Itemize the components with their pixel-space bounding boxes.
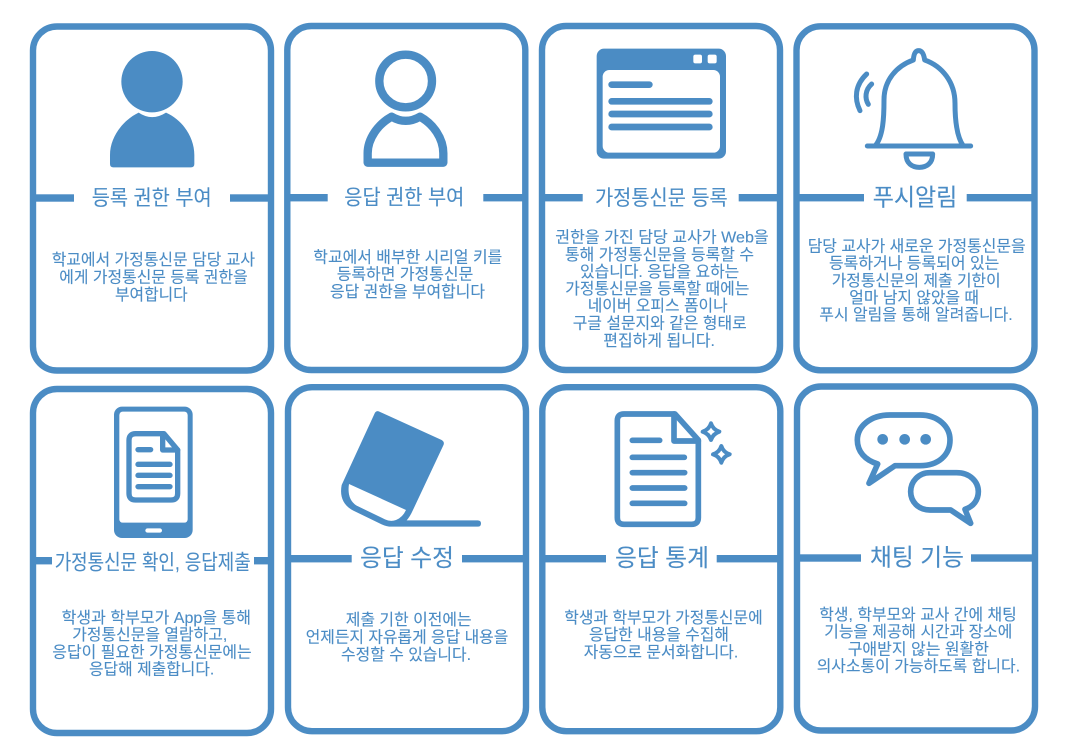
- text block: 권한을 가진 담당 교사가 Web을: [555, 228, 769, 246]
- icon: chat bubbles: [857, 415, 978, 523]
- text block: 학생, 학부모와 교사 간에 채팅: [819, 606, 1017, 624]
- text block: 편집하게 됩니다.: [603, 332, 715, 350]
- text block: [564, 609, 763, 662]
- icon: browser window: [597, 49, 726, 159]
- text block: 응답한 내용을 수집해: [589, 626, 729, 644]
- icon: eraser: [341, 411, 481, 527]
- text block: 얼마 남지 않았을 때: [849, 289, 979, 307]
- text block: 학생과 학부모가 App을 통해: [62, 609, 251, 627]
- text block: 가정통신문을 열람하고,: [72, 626, 227, 644]
- text block: 등록하거나 등록되어 있는: [829, 254, 999, 272]
- text block: 언제든지 자유롭게 응답 내용을: [306, 628, 508, 646]
- text block: 가정통신문을 등록할 때에는: [565, 280, 749, 298]
- heading: 응답 권한 부여: [344, 186, 464, 210]
- panel: 가정통신문 등록: [542, 26, 780, 370]
- panel: 응답 통계: [542, 387, 780, 731]
- text block: 학교에서 배부한 시리얼 키를: [313, 248, 502, 266]
- icon: outline user: [368, 55, 443, 163]
- text block: 통해 가정통신문을 등록할 수: [565, 246, 754, 264]
- text block: [52, 609, 252, 678]
- text block: 자동으로 문서화합니다.: [584, 644, 738, 662]
- text block: [555, 228, 769, 350]
- heading: 등록 권한 부여: [92, 187, 212, 210]
- heading: 가정통신문 등록: [595, 187, 728, 210]
- text block: 있습니다. 응답을 요하는: [580, 263, 739, 281]
- panel: 채팅 기능: [797, 386, 1035, 730]
- text block: 담당 교사가 새로운 가정통신문을: [808, 238, 1026, 256]
- heading: 응답 수정: [360, 545, 454, 572]
- text block: 학생과 학부모가 가정통신문에: [564, 609, 763, 627]
- heading: 응답 통계: [615, 545, 709, 572]
- text block: [52, 251, 255, 304]
- heading: 채팅 기능: [870, 544, 964, 572]
- text block: 부여합니다: [115, 286, 188, 304]
- panel: 등록 권한 부여: [33, 26, 271, 370]
- icon: solid user: [110, 51, 194, 167]
- text block: 에게 가정통신문 등록 권한을: [59, 268, 248, 286]
- heading: 푸시알림: [873, 184, 957, 211]
- text block: 학교에서 가정통신문 담당 교사: [52, 251, 255, 269]
- panel: 가정통신문 확인, 응답제출: [33, 389, 271, 733]
- text block: 구글 설문지와 같은 형태로: [573, 314, 747, 332]
- text block: 기능을 제공해 시간과 장소에: [824, 623, 1012, 641]
- text block: 등록하면 가정통신문: [337, 266, 473, 284]
- text block: [313, 248, 502, 301]
- icon: bell: [856, 51, 971, 167]
- text block: [817, 606, 1020, 676]
- heading: 가정통신문 확인, 응답제출: [55, 552, 251, 574]
- text block: 의사소통이 가능하도록 합니다.: [817, 658, 1020, 676]
- panel: 응답 권한 부여: [287, 26, 525, 370]
- text block: 제출 기한 이전에는: [346, 611, 472, 629]
- text block: 응답해 제출합니다.: [89, 660, 214, 678]
- text block: 수정할 수 있습니다.: [341, 646, 471, 664]
- text block: 응답이 필요한 가정통신문에는: [52, 644, 252, 662]
- text block: 푸시 알림을 통해 알려줍니다.: [819, 306, 1013, 324]
- text block: 응답 권한을 부여합니다: [330, 283, 485, 301]
- icon: document with sparkles: [617, 414, 730, 524]
- panel: 푸시알림: [796, 26, 1034, 370]
- text block: [306, 611, 508, 664]
- text block: 구애받지 않는 원활한: [848, 640, 989, 658]
- icon: phone with document: [114, 407, 193, 538]
- panel: 응답 수정: [288, 387, 526, 731]
- text block: 가정통신문의 제출 기한이: [832, 272, 1001, 290]
- text block: 네이버 오피스 폼이나: [588, 297, 728, 315]
- text block: [808, 238, 1026, 324]
